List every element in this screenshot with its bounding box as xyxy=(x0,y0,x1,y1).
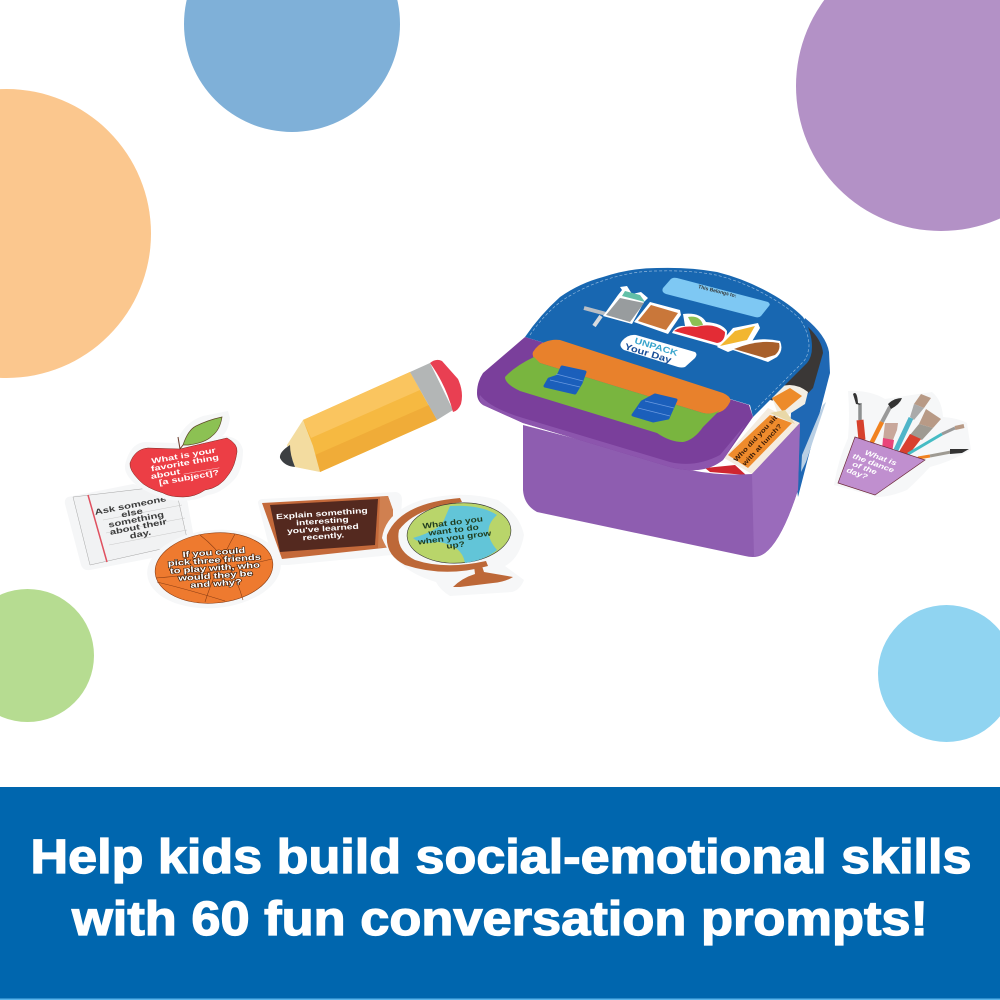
card text: globe: when you grow xyxy=(416,529,493,546)
lid blue top xyxy=(525,268,812,417)
card: globe xyxy=(382,495,524,596)
sticker: book xyxy=(634,302,681,334)
card text: notebook: else xyxy=(121,507,144,520)
brush handles xyxy=(853,393,969,458)
buckle left xyxy=(545,367,585,393)
name label text: This Belongs to: xyxy=(698,284,737,299)
card text: basketball: and why? xyxy=(190,578,242,590)
logo sticker xyxy=(620,335,696,368)
box purple body xyxy=(523,423,800,557)
sticker: apple xyxy=(672,314,727,346)
card: paint brushes xyxy=(834,391,971,497)
card: chalkboard xyxy=(258,492,402,565)
card text: chalkboard: interesting xyxy=(296,515,349,527)
card text: basketball: If you could xyxy=(182,546,246,560)
buckle right xyxy=(633,395,676,421)
card text: notebook: Ask someone xyxy=(94,494,168,517)
decorative circle: blue xyxy=(184,0,400,132)
lid orange flap xyxy=(533,340,730,414)
decorative circle: purple xyxy=(796,0,1000,231)
card text: basketball: would they be xyxy=(177,569,254,583)
card text: basketball: to play with, who xyxy=(170,561,260,576)
card text: chalkboard: you've learned xyxy=(287,522,359,535)
lid stitching xyxy=(530,271,809,410)
card text: paint brushes: the dance xyxy=(851,451,896,475)
logo text: unpack: UNPACK xyxy=(633,336,679,359)
banner xyxy=(0,787,1000,1000)
sticker: pencil xyxy=(717,323,760,352)
decorative circle: green xyxy=(0,589,94,722)
card text: apple: What is your xyxy=(151,446,217,465)
card text: chalkboard: recently. xyxy=(302,531,345,542)
card text: paint brushes: day? xyxy=(845,465,869,481)
headline: Help kids build social-emotional skills xyxy=(30,831,971,884)
card: notebook paper xyxy=(65,484,195,570)
card text: inside box: with at lunch? xyxy=(740,422,784,468)
logo text: your day: Your Day xyxy=(623,342,673,366)
box back blue side xyxy=(790,318,830,497)
card text: globe: What do you xyxy=(422,514,483,530)
toy: backpack box xyxy=(477,268,830,557)
card text: notebook: day. xyxy=(129,528,152,541)
card text: notebook: something xyxy=(108,510,165,530)
pencil toy xyxy=(280,360,462,472)
card: basketball xyxy=(144,524,284,614)
sticker: water bottle xyxy=(603,286,648,324)
card text: basketball: pick three friends xyxy=(168,553,261,568)
card text: notebook: about their xyxy=(109,517,168,537)
name label xyxy=(662,278,770,317)
card text: globe: want to do xyxy=(427,523,480,537)
card text: apple: favorite thing xyxy=(150,453,220,473)
sticker: football xyxy=(730,339,781,362)
headline: with 60 fun conversation prompts! xyxy=(71,893,928,946)
cards inside box xyxy=(705,385,808,475)
brush cup xyxy=(838,437,925,495)
lid green pocket xyxy=(505,357,720,442)
card text: paint brushes: of the xyxy=(851,459,878,476)
card text: chalkboard: Explain something xyxy=(276,506,368,521)
decorative circle: light blue xyxy=(878,605,1000,742)
box interior xyxy=(770,327,823,405)
card text: apple: [a subject]? xyxy=(158,468,220,487)
card text: apple: about ______ xyxy=(150,461,220,481)
card: apple xyxy=(125,411,243,501)
card text: globe: up? xyxy=(446,540,465,550)
card text: inside box: Who did you sit xyxy=(732,413,779,463)
sticker: zipper xyxy=(584,308,610,326)
lid purple base xyxy=(477,337,753,470)
decorative circle: orange xyxy=(0,89,151,378)
card text: paint brushes: What is xyxy=(864,448,898,467)
